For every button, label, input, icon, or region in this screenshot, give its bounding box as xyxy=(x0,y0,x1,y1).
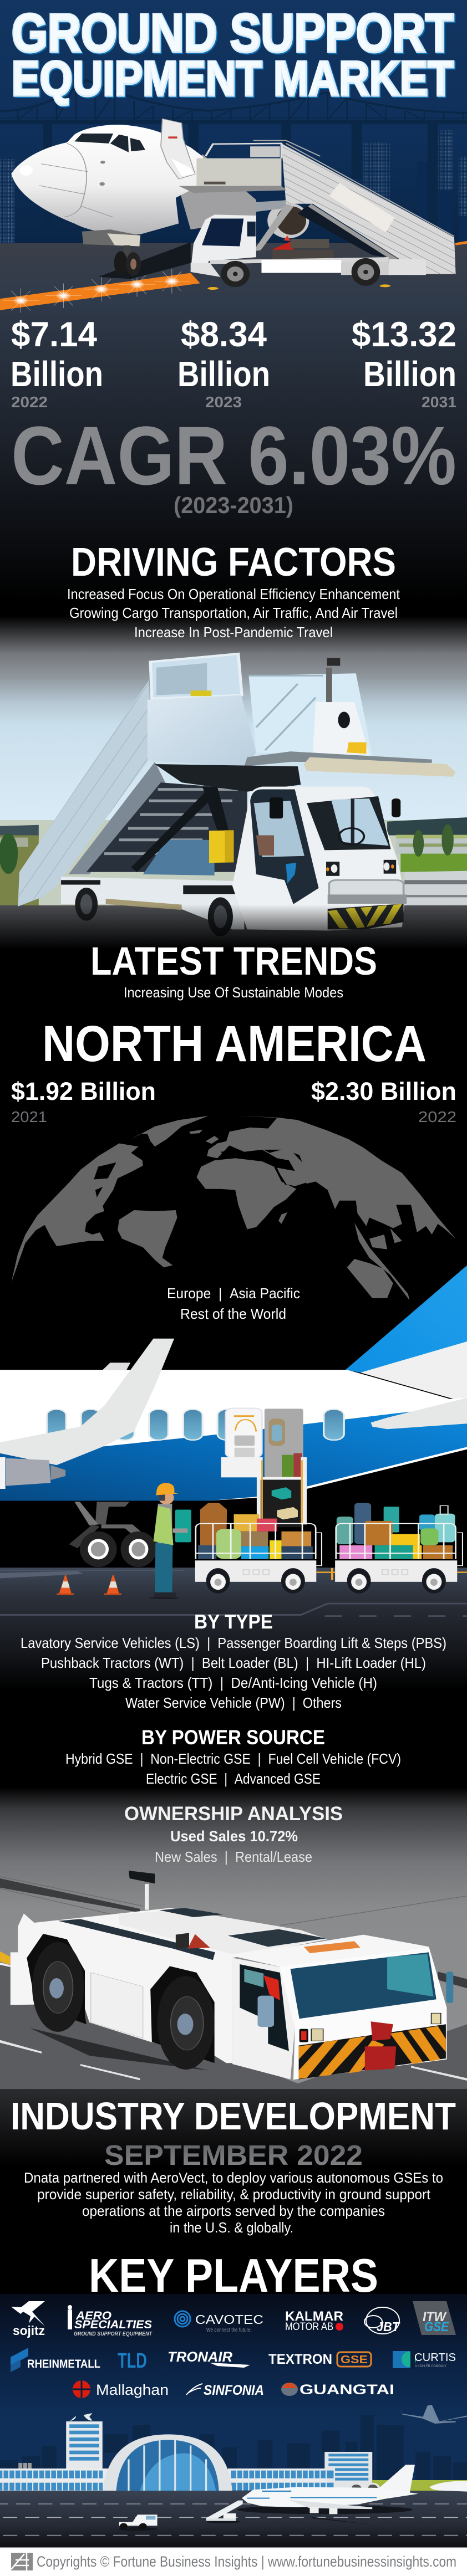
logo: curtis xyxy=(393,2349,456,2369)
text: industry development summary: in the U.S. & globally. xyxy=(170,2219,293,2236)
stat: north america 2021: 2021 xyxy=(11,1108,47,1125)
parked airliner with stairs xyxy=(206,2465,418,2525)
CAGR period: (2023-2031) xyxy=(174,492,293,518)
traffic cones xyxy=(57,1575,121,1595)
logo: kalmar motor ab: KALMAR xyxy=(285,2309,343,2324)
panel: market size 2023: $8.34 xyxy=(181,315,267,354)
panel: market size 2022: 2022 xyxy=(11,393,48,411)
list: driving factors: Increased Focus On Operational Efficiency Enhancement xyxy=(67,586,400,602)
panel: market size 2023: Billion xyxy=(177,354,270,394)
panel: market size 2031: 2031 xyxy=(422,393,456,411)
logo: textron gse: GSE xyxy=(341,2354,368,2366)
list: by power source xyxy=(65,1750,401,1787)
stat: north america 2022: $2.30 Billion xyxy=(311,1077,456,1105)
footer band xyxy=(0,2547,467,2576)
logo: guangtai xyxy=(281,2382,394,2398)
list: other regions xyxy=(167,1285,300,1322)
panel: key players logos and airport xyxy=(0,2294,467,2548)
heading: by power source: BY POWER SOURCE xyxy=(141,1726,325,1749)
logo: textron gse: TEXTRON xyxy=(268,2352,332,2367)
list: driving factors: Growing Cargo Transportation, Air Traffic, And Air Travel xyxy=(69,605,398,621)
logo: kalmar motor ab xyxy=(285,2309,343,2333)
terminal arch xyxy=(103,2434,232,2492)
list: other regions: Europe | Asia Pacific xyxy=(167,1285,300,1302)
worker with suitcase xyxy=(148,1483,191,1599)
logo: tronair: TRONAIR xyxy=(167,2349,232,2365)
logo: rheinmetall xyxy=(11,2348,100,2372)
logo: itw gse: GSE xyxy=(424,2319,449,2334)
heading: driving factors: DRIVING FACTORS xyxy=(71,540,396,585)
logo: aero specialties: AERO xyxy=(75,2309,111,2322)
airport control tower xyxy=(18,2413,103,2470)
logo: jbt xyxy=(364,2307,400,2334)
list: driving factors: Increase In Post-Pandemic Travel xyxy=(134,624,333,641)
illustration: baggage loading on airliner xyxy=(0,1266,467,1937)
baggage cart two xyxy=(335,1503,467,1594)
list: by power source: Hybrid GSE | Non-Electric GSE | Fuel Cell Vehicle (FCV) xyxy=(65,1750,401,1767)
heading: north america: NORTH AMERICA xyxy=(42,1016,427,1072)
title xyxy=(12,2,455,107)
logo: curtis: CURTIS xyxy=(414,2352,456,2364)
chart: world map globe xyxy=(11,1116,456,1300)
panel: market size 2031 xyxy=(352,315,456,411)
logo: sinfonia: SINFONIA xyxy=(204,2383,264,2398)
logo: aero specialties xyxy=(68,2305,153,2337)
illustration: passenger stair truck xyxy=(179,140,456,290)
logo: cavotec: CAVOTEC xyxy=(195,2312,263,2327)
text: latest trend item: Increasing Use Of Sustainable Modes xyxy=(124,984,343,1001)
illustration: pushback tractor xyxy=(11,1871,453,2082)
logo: aero specialties: SPECIALTIES xyxy=(74,2318,152,2331)
logo: aero specialties: GROUND SUPPORT EQUIPMENT xyxy=(74,2331,153,2337)
text: industry development summary: provide superior safety, reliability, & productivity in ground support xyxy=(37,2186,431,2203)
landing gear xyxy=(69,1502,156,1567)
illustration: airport terminal and apron xyxy=(0,2405,467,2548)
text: industry development summary: operations at the airports served by the companies xyxy=(82,2203,385,2219)
logo: sojitz: sojitz xyxy=(13,2323,45,2338)
heading: key players: KEY PLAYERS xyxy=(89,2250,378,2302)
photo: stair truck background xyxy=(0,616,467,957)
stat: north america 2022: 2022 xyxy=(418,1108,456,1125)
logo: sojitz xyxy=(11,2301,45,2338)
stat: north america 2022 xyxy=(311,1077,456,1125)
logo: jbt: JBT xyxy=(377,2319,400,2334)
panel: market size 2022: Billion xyxy=(11,354,103,394)
stat: north america 2021: $1.92 Billion xyxy=(11,1077,156,1105)
icon: Fortune Business Insights logo xyxy=(11,2553,33,2570)
date: september 2022: SEPTEMBER 2022 xyxy=(104,2139,363,2171)
stat: used sales share: Used Sales 10.72% xyxy=(170,1828,298,1845)
photo: aircraft tractor on apron xyxy=(0,1787,467,2167)
distant airliners xyxy=(400,2405,467,2492)
logo: rheinmetall: RHEINMETALL xyxy=(27,2358,100,2370)
wing and engine xyxy=(0,1339,174,1489)
list: by type: Pushback Tractors (WT) | Belt Loader (BL) | HI-Lift Loader (HL) xyxy=(41,1655,426,1671)
logo: guangtai: GUANGTAI xyxy=(300,2382,394,2398)
heading: by type: BY TYPE xyxy=(194,1610,273,1633)
text: industry development summary xyxy=(24,2169,443,2236)
logo: cavotec xyxy=(175,2311,263,2333)
logo: textron gse xyxy=(268,2352,371,2367)
list: driving factors xyxy=(67,586,400,641)
list: by type: Water Service Vehicle (PW) | Others xyxy=(125,1694,342,1711)
list: other regions: Rest of the World xyxy=(180,1305,286,1322)
heading: latest trends: LATEST TRENDS xyxy=(90,940,377,984)
list: by type: Tugs & Tractors (TT) | De/Anti-Icing Vehicle (H) xyxy=(89,1674,377,1691)
apron and runway markings xyxy=(0,2491,467,2548)
panel: header scene xyxy=(0,0,467,603)
service van xyxy=(119,2514,158,2531)
text: industry development summary: Dnata partnered with AeroVect, to deploy various autonomous GSEs to xyxy=(24,2169,443,2186)
logo: mallaghan xyxy=(73,2380,169,2398)
panel: market size 2023: 2023 xyxy=(205,393,242,411)
illustration: stair truck photo xyxy=(18,654,456,936)
list: by type xyxy=(21,1635,446,1711)
airliner tail and fuselage xyxy=(0,1266,467,1500)
panel: market size 2023 xyxy=(177,315,270,411)
baggage cart one xyxy=(195,1503,335,1594)
panel: market size 2022: $7.14 xyxy=(11,315,97,354)
panel: market size 2022 xyxy=(11,315,103,411)
terminal wings xyxy=(0,2452,467,2492)
logo: mallaghan: Mallaghan xyxy=(96,2382,169,2398)
illustration: airliner nose with open door xyxy=(11,119,309,279)
stat: north america 2021 xyxy=(11,1077,156,1125)
ground and runway markings xyxy=(0,1568,467,1937)
illustration: runway stripe with lights xyxy=(0,241,467,313)
illustration: bridge and city skyline xyxy=(0,80,467,243)
logo: itw gse xyxy=(413,2301,456,2335)
list: by power source: Electric GSE | Advanced GSE xyxy=(146,1770,321,1787)
panel: market size 2031: $13.32 xyxy=(352,315,456,354)
logo: kalmar motor ab: MOTOR AB xyxy=(285,2321,333,2333)
logo: tld: TLD xyxy=(118,2349,147,2373)
logo: tronair xyxy=(167,2349,250,2368)
heading: ownership analysis: OWNERSHIP ANALYSIS xyxy=(124,1803,343,1825)
logo: itw gse: ITW xyxy=(423,2309,447,2324)
cargo door and belt loader xyxy=(221,1408,307,1528)
list: other ownership types: New Sales | Rental/Lease xyxy=(155,1848,312,1865)
logo: curtis: A KOHLER COMPANY xyxy=(415,2364,447,2368)
logo: cavotec: We connect the future. xyxy=(206,2327,252,2333)
